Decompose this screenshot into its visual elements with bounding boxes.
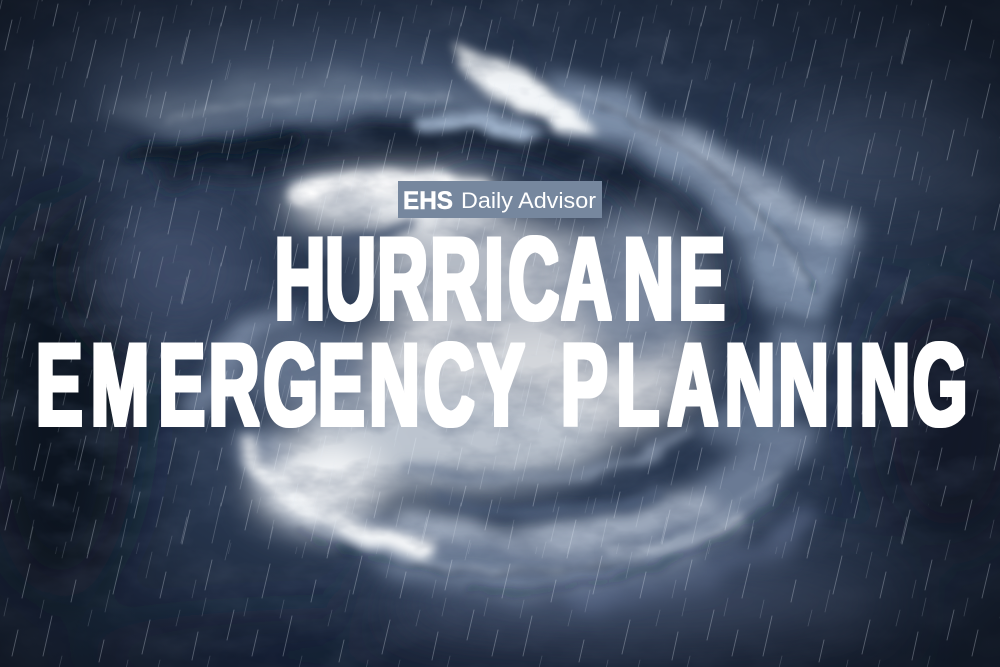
luminous centre	[240, 173, 712, 527]
cloud streaks	[130, 140, 740, 551]
white wedge at the top	[420, 45, 600, 142]
title: EMERGENCY PLANNING	[36, 321, 968, 451]
dark eye wall	[130, 118, 745, 330]
soft swirl streaks	[170, 95, 815, 592]
logo badge: EHS	[403, 187, 453, 215]
logo badge: Daily Advisor	[461, 188, 596, 213]
lower spiral bands	[185, 300, 825, 610]
bright outer spiral band	[100, 70, 860, 320]
title: HURRICANE	[275, 215, 725, 345]
